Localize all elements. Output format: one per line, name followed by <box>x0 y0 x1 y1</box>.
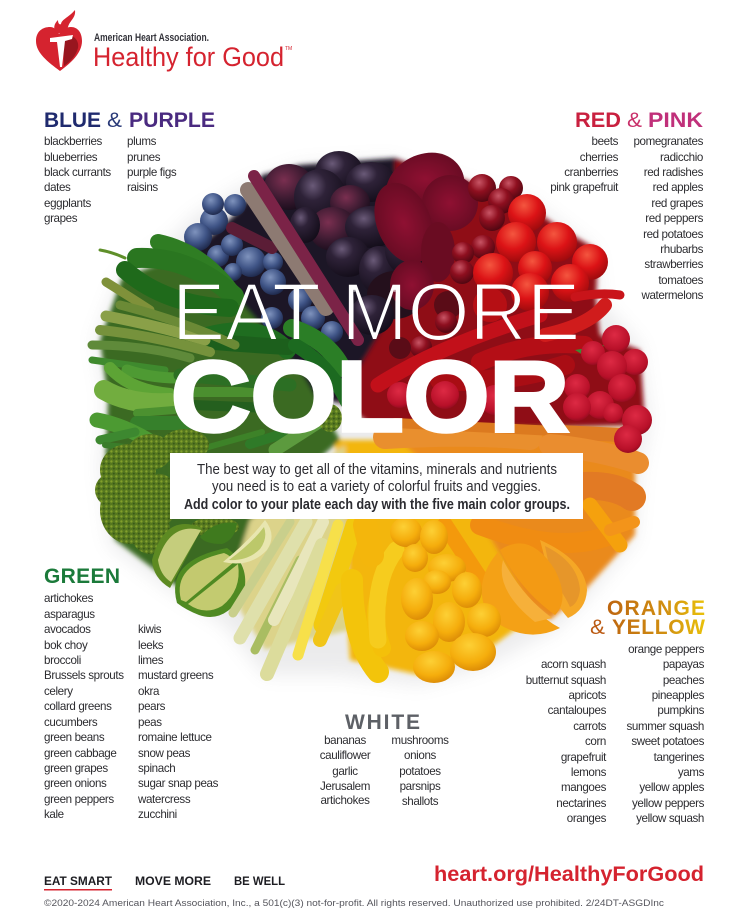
yellow squash strips <box>298 525 354 655</box>
list: green foods, column 1: collard greens <box>44 700 112 713</box>
list: red and pink foods, column 1: beets <box>592 135 619 148</box>
broccoli <box>95 404 342 554</box>
list: red and pink foods, column 2: strawberries <box>644 258 704 271</box>
intro text box: you need is to eat a variety of colorful fruits and veggies. <box>212 479 541 495</box>
list: green foods, column 1: bok choy <box>44 639 88 652</box>
list: orange and yellow foods, column 2: summer squash <box>626 720 704 733</box>
list: green foods, column 2: okra <box>138 685 160 698</box>
intro text box <box>170 453 583 519</box>
plums <box>264 151 425 335</box>
list: orange and yellow foods, column 1: carrots <box>573 720 607 733</box>
list: red and pink foods, column 2: red grapes <box>651 197 704 210</box>
heading: Blue & Purple: PURPLE <box>129 109 215 132</box>
heading: Red & Pink: & <box>627 109 642 132</box>
list: orange and yellow foods, column 2: yellow apples <box>639 781 705 794</box>
list: orange and yellow foods, column 2: sweet potatoes <box>631 735 705 748</box>
list: blue and purple foods, column 1: eggplants <box>44 197 91 210</box>
logo: American Heart Association Healthy for Good <box>36 10 292 72</box>
list: white foods, column 2: mushrooms <box>391 734 449 747</box>
list: green foods, column 2: kiwis <box>138 623 162 636</box>
list: orange and yellow foods, column 1 <box>526 658 607 825</box>
red and pink group <box>363 153 648 423</box>
list: red and pink foods, column 1: pink grapefruit <box>550 181 619 194</box>
list: white foods, column 2: potatoes <box>399 765 441 778</box>
list: green foods, column 2 <box>137 623 219 821</box>
heading: Blue & Purple: BLUE <box>44 109 101 132</box>
list: green foods, column 2: watercress <box>137 793 191 806</box>
footer navigation: BE WELL <box>234 874 285 888</box>
green stems on peppers <box>575 345 605 358</box>
list: orange and yellow foods, column 2: yellow squash <box>636 812 704 825</box>
list: blue and purple foods, column 2 <box>127 135 177 194</box>
list: orange and yellow foods, column 2: yams <box>678 766 705 779</box>
list: red and pink foods, column 2: radicchio <box>660 151 703 164</box>
list: white foods, column 1 <box>320 734 371 807</box>
list: orange and yellow foods, column 2: yellow peppers <box>632 797 705 810</box>
list: green foods, column 1: green beans <box>44 731 105 744</box>
list: orange and yellow foods, column 2: orange peppers <box>628 643 705 656</box>
list: blue and purple foods, column 1: black currants <box>44 166 111 179</box>
heading: Orange & Yellow: & <box>590 616 605 639</box>
photo: circle of colorful fruits and vegetables <box>92 151 652 685</box>
heading: Orange & Yellow: YELLOW <box>612 616 705 639</box>
list: red and pink foods, column 2: tomatoes <box>658 274 704 287</box>
list: orange and yellow foods, column 1: acorn squash <box>541 658 606 671</box>
green beans and snap peas <box>92 360 325 450</box>
list: white foods, column 1: cauliflower <box>320 749 371 762</box>
list: red and pink foods, column 2: red peppers <box>645 212 704 225</box>
list: green foods, column 1: cucumbers <box>44 716 98 729</box>
list: blue and purple foods, column 2: plums <box>127 135 157 148</box>
list: blue and purple foods, column 1: grapes <box>44 212 78 225</box>
list: green foods, column 2: snow peas <box>138 747 191 760</box>
beets <box>363 153 478 310</box>
list: orange and yellow foods, column 2: tangerines <box>654 751 705 764</box>
list: orange and yellow foods, column 1: nectarines <box>556 797 607 810</box>
list: green foods, column 1: kale <box>44 808 64 821</box>
list: white foods, column 2: shallots <box>402 795 439 808</box>
list: blue and purple foods, column 2: prunes <box>127 151 161 164</box>
list: orange and yellow foods, column 1: corn <box>585 735 606 748</box>
list: green foods, column 1: green grapes <box>44 762 108 775</box>
raspberries on carrots <box>614 405 652 453</box>
list: orange and yellow foods, column 1: grapefruit <box>561 751 607 764</box>
list: red and pink foods, column 1 <box>550 135 619 194</box>
list: orange and yellow foods, column 2: peaches <box>663 674 705 687</box>
list: white foods, column 1: artichokes <box>320 794 370 807</box>
logo text: Healthy for Good: Healthy for Good <box>93 42 284 72</box>
list: green foods, column 1: green onions <box>44 777 107 790</box>
list: green foods, column 1: green cabbage <box>44 747 116 760</box>
list: blue and purple foods, column 2: purple figs <box>127 166 177 179</box>
heading: Blue & Purple: & <box>107 109 122 132</box>
list: white foods, column 2 <box>391 734 449 808</box>
list: blue and purple foods, column 2: raisins <box>127 181 158 194</box>
list: red and pink foods, column 2: rhubarbs <box>660 243 704 256</box>
orange and yellow group <box>385 405 652 683</box>
list: red and pink foods, column 1: cranberries <box>564 166 619 179</box>
heading: Green: GREEN <box>44 565 120 588</box>
list: orange and yellow foods, column 1: cantaloupes <box>548 704 607 717</box>
copyright: ©2020-2024 American Heart Association, Inc., a 501(c)(3) not-for-profit. All rights reserved. Unauthorized use prohibited. 2/24DT-ASGDInc <box>44 898 664 908</box>
footer navigation <box>44 874 285 890</box>
list: orange and yellow foods, column 2: papayas <box>663 658 705 671</box>
list: green foods, column 1: artichokes <box>44 592 94 605</box>
list: red and pink foods, column 2: watermelons <box>640 289 704 302</box>
footer navigation: EAT SMART <box>44 874 113 888</box>
list: white foods, column 2: onions <box>404 749 437 762</box>
blueberries <box>184 193 343 343</box>
limes <box>152 520 272 617</box>
heading: Red & Pink: RED <box>575 109 621 132</box>
yellow peppers <box>352 525 396 672</box>
list: orange and yellow foods, column 2: pumpkins <box>657 704 705 717</box>
list: blue and purple foods, column 1: dates <box>44 181 71 194</box>
list: red and pink foods, column 2: red potatoes <box>643 228 704 241</box>
raspberries <box>387 325 648 423</box>
tomatoes <box>473 194 608 322</box>
intro text box: Add color to your plate each day with the five main color groups. <box>184 497 570 513</box>
soft shadow <box>95 160 650 685</box>
heading: Blue & Purple <box>44 109 215 132</box>
footer URL: heart.org/HealthyForGood <box>434 862 704 886</box>
list: green foods, column 1: celery <box>44 685 73 698</box>
list: green foods, column 2: peas <box>138 716 162 729</box>
intro text box: The best way to get all of the vitamins, minerals and nutrients <box>197 462 557 478</box>
list: green foods, column 1 <box>44 592 124 821</box>
list: green foods, column 1: green peppers <box>44 793 114 806</box>
red peppers <box>378 294 620 385</box>
asparagus <box>92 282 235 358</box>
list: red and pink foods, column 2 <box>633 135 704 302</box>
list: white foods, column 1: garlic <box>332 765 358 778</box>
list: green foods, column 2: limes <box>138 654 164 667</box>
kumquats <box>390 517 501 683</box>
green chili peppers <box>100 242 347 402</box>
list: blue and purple foods, column 1 <box>44 135 111 225</box>
list: blue and purple foods, column 1: blueberries <box>44 151 98 164</box>
heading: Orange & Yellow: ORANGE <box>607 597 705 620</box>
heading: Orange & Yellow <box>590 597 705 639</box>
list: green foods, column 2: leeks <box>138 639 164 652</box>
title: COLOR: COLOR <box>171 341 569 453</box>
logo text: American Heart Association: American Heart Association. <box>94 32 209 44</box>
list: green foods, column 1: broccoli <box>44 654 81 667</box>
list: orange and yellow foods, column 1: butternut squash <box>526 674 606 687</box>
heading: Red & Pink: PINK <box>648 109 703 132</box>
list: orange and yellow foods, column 1: lemons <box>571 766 607 779</box>
list: green foods, column 2: sugar snap peas <box>138 777 219 790</box>
white and pale vegetables <box>233 522 396 674</box>
list: green foods, column 1: asparagus <box>44 608 95 621</box>
list: red and pink foods, column 2: red radishes <box>644 166 704 179</box>
list: white foods, column 1: bananas <box>324 734 366 747</box>
list: green foods, column 2: pears <box>138 700 166 713</box>
list: orange and yellow foods, column 1: oranges <box>567 812 607 825</box>
list: orange and yellow foods, column 1: apricots <box>568 689 607 702</box>
list: red and pink foods, column 2: pomegranates <box>633 135 704 148</box>
list: white foods, column 2: parsnips <box>400 780 441 793</box>
logo trademark: TM <box>285 46 292 52</box>
icon: heart and torch <box>36 10 82 71</box>
orange peppers and carrots <box>385 423 638 583</box>
list: white foods, column 1: Jerusalem <box>320 780 370 793</box>
footer navigation: MOVE MORE <box>135 874 211 888</box>
list: red and pink foods, column 2: red apples <box>653 181 704 194</box>
cherries and cranberries <box>389 174 523 359</box>
base colour wedges <box>100 158 645 675</box>
blue and purple group <box>184 151 425 343</box>
list: green foods, column 1: avocados <box>44 623 91 636</box>
pale lemongrass strips <box>233 522 323 674</box>
list: green foods, column 1: Brussels sprouts <box>44 669 124 682</box>
green group <box>92 242 347 617</box>
list: orange and yellow foods, column 2: pineapples <box>652 689 705 702</box>
title: EAT MORE: EAT MORE <box>172 267 580 358</box>
list: green foods, column 2: romaine lettuce <box>138 731 212 744</box>
list: orange and yellow foods, column 2 <box>626 643 705 825</box>
heading: White: WHITE <box>345 711 420 734</box>
purple carrots <box>232 176 358 340</box>
heading: Red & Pink <box>575 109 703 132</box>
list: green foods, column 2: zucchini <box>138 808 177 821</box>
list: blue and purple foods, column 1: blackberries <box>44 135 103 148</box>
list: green foods, column 2: mustard greens <box>138 669 214 682</box>
list: red and pink foods, column 1: cherries <box>580 151 619 164</box>
orange wedges <box>482 540 587 635</box>
list: orange and yellow foods, column 1: mangoes <box>561 781 607 794</box>
list: green foods, column 2: spinach <box>138 762 175 775</box>
